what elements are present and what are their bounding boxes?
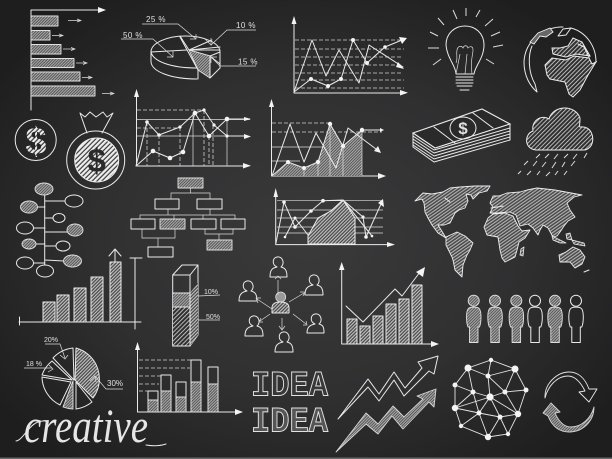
bottom edge strip xyxy=(0,458,612,459)
dollar sign: $ xyxy=(25,121,47,163)
IDEA outlined word, top: IDEA xyxy=(251,366,328,406)
bag dollar sign: $ xyxy=(88,142,106,179)
mind map xyxy=(16,183,83,277)
recycle arrows icon xyxy=(543,372,597,432)
org chart xyxy=(131,178,245,257)
pie labels: 10 % xyxy=(236,21,256,30)
australia xyxy=(559,247,585,268)
column chart with dashed lines xyxy=(135,342,243,415)
islands and small coasts xyxy=(520,233,585,256)
middle line chart with dots xyxy=(134,89,251,168)
zigzag hatched arrow xyxy=(336,389,436,452)
area chart with peak xyxy=(274,188,395,247)
bulb rays xyxy=(428,8,503,65)
column labels xyxy=(204,289,220,321)
IDEA outlined word, bottom: IDEA xyxy=(251,402,328,442)
pie chart labels xyxy=(26,337,123,388)
africa xyxy=(484,213,530,262)
pie chart labels: 30% xyxy=(107,379,123,388)
globe icon xyxy=(524,27,596,97)
pie labels: 50 % xyxy=(123,31,143,40)
north america and greenland xyxy=(415,186,490,238)
horizontal bar chart xyxy=(31,7,114,110)
banknote dollar sign: $ xyxy=(458,119,468,138)
3D column chart xyxy=(173,265,220,346)
south america xyxy=(446,232,473,277)
rain cloud icon xyxy=(518,108,593,176)
network sphere xyxy=(452,358,528,440)
light bulb icon xyxy=(428,8,503,90)
eurasia xyxy=(490,188,582,237)
hub person xyxy=(272,292,289,313)
pie chart labels: 20% xyxy=(44,337,58,344)
circular pie chart xyxy=(24,337,123,409)
dollar coin icon xyxy=(15,120,56,163)
pie labels xyxy=(123,15,258,66)
pie chart labels: 18 % xyxy=(26,361,42,368)
area line chart xyxy=(269,99,386,179)
vertical bar chart with arrow xyxy=(19,249,142,329)
row of people icons xyxy=(466,295,583,342)
creative handwritten word: creative xyxy=(24,400,148,453)
column labels: 50% xyxy=(206,314,220,321)
people network xyxy=(239,257,324,352)
money bag icon xyxy=(67,112,125,189)
pie labels: 15 % xyxy=(238,58,258,66)
stack of banknotes icon xyxy=(413,109,510,162)
pie labels: 25 % xyxy=(146,15,166,24)
rain dashes xyxy=(518,153,587,176)
zigzag outline arrow xyxy=(338,356,438,419)
pie leader lines xyxy=(121,24,256,66)
world map xyxy=(415,186,589,277)
top right line chart xyxy=(292,16,408,96)
3D pie chart xyxy=(121,15,258,79)
bar chart with trend arrow xyxy=(339,262,439,347)
column labels: 10% xyxy=(204,289,218,296)
